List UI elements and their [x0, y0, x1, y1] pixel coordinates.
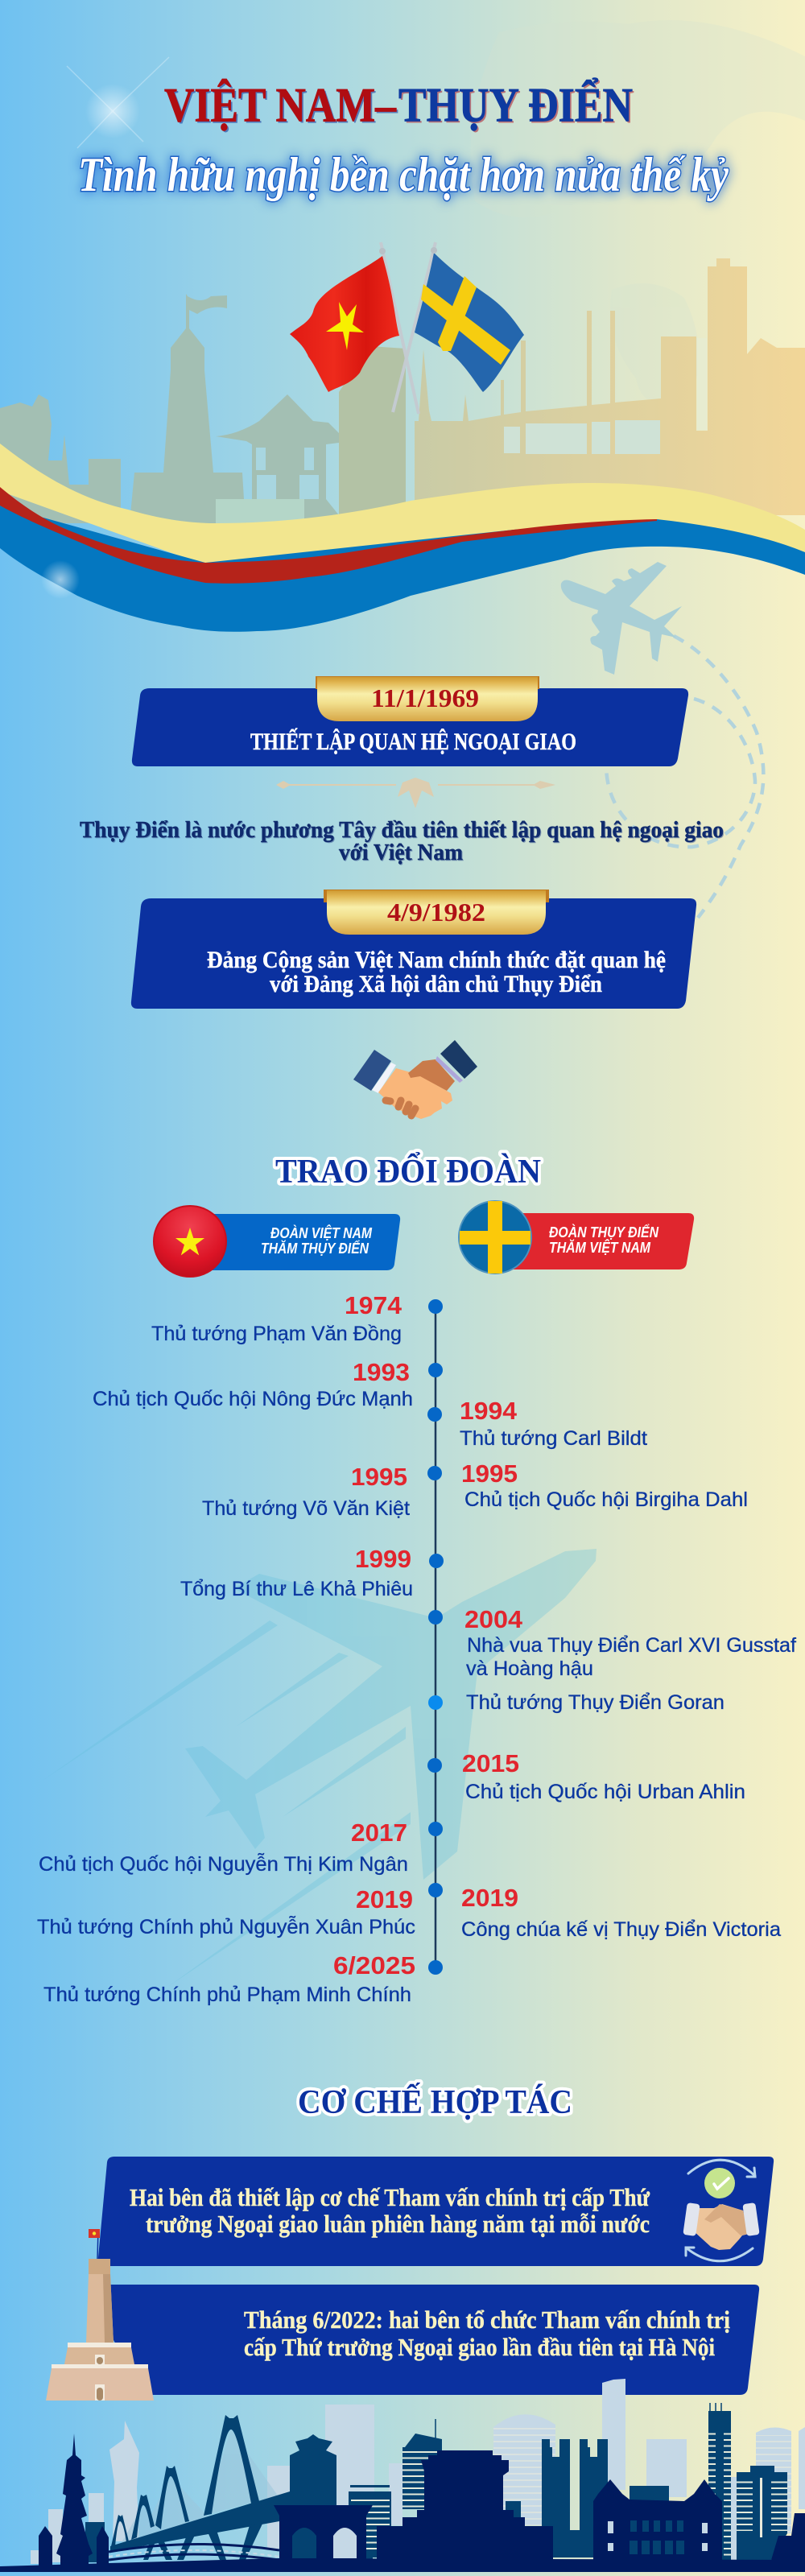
text block: first Western country: với Việt Nam: [339, 840, 463, 865]
timeline dots: [427, 1299, 444, 1975]
dark foreground buildings: [0, 2434, 805, 2572]
entry 1999: Tổng Bí thư Lê Khả Phiêu: [180, 1578, 413, 1600]
title: VIỆT NAM–: [164, 79, 397, 132]
entry Goran: Thủ tướng Thụy Điển Goran: [466, 1691, 724, 1714]
skyline: bottom city: [0, 2379, 805, 2572]
banner: [131, 898, 696, 1009]
flag: Sweden: [415, 253, 524, 392]
entry 1995 Vietnam: 1995: [351, 1463, 407, 1491]
ornament: [276, 778, 555, 808]
sparkle: ribbon: [41, 560, 80, 599]
tower antennas: [436, 2403, 721, 2439]
entry 2015: [462, 1749, 745, 1803]
heading: CƠ CHẾ HỢP TÁC: CƠ CHẾ HỢP TÁC: [298, 2083, 572, 2121]
entry 2019 Sweden: Công chúa kế vị Thụy Điển Victoria: [461, 1918, 781, 1941]
bridge railing: [109, 2544, 279, 2560]
panel: 11/1/1969: [132, 676, 688, 766]
entry 1995 Sweden: [461, 1459, 748, 1511]
entry 2015: 2015: [462, 1749, 519, 1777]
entry 2004: 2004: [464, 1605, 523, 1633]
entry 2019 Sweden: 2019: [461, 1884, 518, 1912]
entry 2017: [39, 1818, 408, 1876]
timeline: [37, 1291, 796, 2006]
entry 2015: Chủ tịch Quốc hội Urban Ahlin: [465, 1781, 745, 1803]
light background buildings: [31, 2379, 805, 2564]
skyline: left silhouette: [0, 294, 406, 531]
panel: June 2022 consultation: Tháng 6/2022: hai bên tổ chức Tham vấn chính trị: [244, 2306, 730, 2334]
entry 1995 Sweden: Chủ tịch Quốc hội Birgiha Dahl: [464, 1488, 748, 1511]
entry 2019 Sweden: [461, 1884, 781, 1941]
ribbon: yellow: [0, 444, 805, 565]
entry 1993: [93, 1358, 413, 1410]
text: trưởng Ngoại giao luân phiên hàng năm tại mỗi nước: [146, 2210, 650, 2238]
bridge cables: [121, 2429, 278, 2544]
description: với Đảng Xã hội dân chủ Thụy Điển: [270, 971, 602, 997]
entry 1994: Thủ tướng Carl Bildt: [460, 1427, 647, 1450]
legend: Vietnam delegation: [154, 1206, 400, 1277]
entry 1995 Sweden: 1995: [461, 1459, 518, 1488]
entry 1994: 1994: [460, 1397, 518, 1425]
entry 2004: [464, 1605, 796, 1680]
panel: consultation mechanism: [97, 2157, 774, 2266]
heading: THIẾT LẬP QUAN HỆ NGOẠI GIAO: [250, 728, 576, 755]
heading: TRAO ĐỔI ĐOÀN: TRAO ĐỔI ĐOÀN: [275, 1151, 541, 1191]
entry 2004: Nhà vua Thụy Điển Carl XVI Gusstaf: [467, 1634, 796, 1657]
entry 1993: Chủ tịch Quốc hội Nông Đức Mạnh: [93, 1388, 413, 1410]
date ribbon: [316, 676, 539, 721]
entry 2019 Vietnam: [37, 1885, 415, 1938]
legend: Sweden delegation: THĂM VIỆT NAM: [549, 1239, 651, 1256]
entry 1999: 1999: [355, 1545, 411, 1573]
legend: Sweden delegation: [459, 1201, 694, 1274]
legend: Vietnam delegation: ĐOÀN VIỆT NAM: [270, 1224, 373, 1241]
banner: [132, 688, 688, 766]
text block: first Western country: [80, 817, 724, 865]
entry 1993: 1993: [353, 1358, 410, 1386]
flag poles: [381, 242, 436, 414]
description: Đảng Cộng sản Việt Nam chính thức đặt quan hệ: [207, 947, 666, 973]
title: THỤY ĐIỂN: [400, 80, 634, 134]
palace windows: [608, 2521, 708, 2551]
bridge openings: [504, 338, 707, 454]
flag: Vietnam: [290, 256, 399, 392]
arch openings: [292, 2528, 316, 2558]
legend: Vietnam delegation: THĂM THỤY ĐIỂN: [261, 1240, 369, 1257]
skyline: right silhouette: [415, 258, 805, 515]
text: [130, 2183, 650, 2238]
entry 6/2025: Thủ tướng Chính phủ Phạm Minh Chính: [43, 1984, 411, 2006]
watermark: large plane: [43, 1549, 597, 1986]
panel: 4/9/1982: [131, 890, 696, 1009]
title: VIỆT NAM–: [166, 80, 398, 134]
icon: small plane: [561, 562, 682, 675]
panel: June 2022 consultation: [110, 2285, 759, 2395]
title: THỤY ĐIỂN: [398, 79, 633, 132]
entry 1995 Vietnam: [202, 1463, 410, 1520]
text block: first Western country: Thụy Điển là nước phương Tây đầu tiên thiết lập quan hệ ngoại giao: [80, 817, 724, 843]
entry 2019 Vietnam: Thủ tướng Chính phủ Nguyễn Xuân Phúc: [37, 1915, 415, 1938]
entry 6/2025: [43, 1951, 415, 2006]
title: [164, 79, 634, 134]
pole finials: [379, 247, 437, 254]
entry 2017: Chủ tịch Quốc hội Nguyễn Thị Kim Ngân: [39, 1852, 408, 1876]
entry 2019 Vietnam: 2019: [356, 1885, 413, 1913]
bridge arches: [204, 2415, 259, 2516]
flight path: dashed lines: [606, 636, 763, 918]
entry 1974: [151, 1291, 402, 1345]
faint world map: [470, 20, 805, 403]
building stripes: [351, 2429, 787, 2560]
entry 1995 Vietnam: Thủ tướng Võ Văn Kiệt: [202, 1497, 410, 1520]
panel: June 2022 consultation: cấp Thứ trưởng Ngoại giao lần đầu tiên tại Hà Nội: [244, 2333, 715, 2361]
text: Hai bên đã thiết lập cơ chế Tham vấn chính trị cấp Thứ: [130, 2183, 650, 2211]
entry 1994: [460, 1397, 647, 1450]
icon: Hanoi flag tower: [46, 2229, 154, 2401]
sparkle: header: [67, 57, 169, 148]
entry 2017: 2017: [351, 1818, 407, 1847]
flags: [290, 242, 524, 414]
ribbon: blue: [0, 506, 805, 632]
entry 1974: 1974: [345, 1291, 402, 1319]
ribbon: red: [0, 487, 657, 584]
entry 1999: [180, 1545, 413, 1600]
icon: agreement handshake: [683, 2160, 760, 2261]
entry 6/2025: 6/2025: [333, 1951, 415, 1979]
legend: Sweden delegation: ĐOÀN THỤY ĐIỂN: [549, 1224, 659, 1241]
axis: [435, 1307, 436, 1967]
entry 1974: Thủ tướng Phạm Văn Đồng: [151, 1323, 402, 1345]
mid blue buildings: [85, 2411, 787, 2562]
date ribbon: 4/9/1982: [387, 898, 485, 927]
description: [207, 947, 666, 997]
date ribbon: 11/1/1969: [371, 683, 479, 712]
entry 2004: và Hoàng hậu: [466, 1657, 593, 1680]
icon: handshake: [353, 1040, 477, 1119]
date ribbon: [324, 890, 549, 935]
